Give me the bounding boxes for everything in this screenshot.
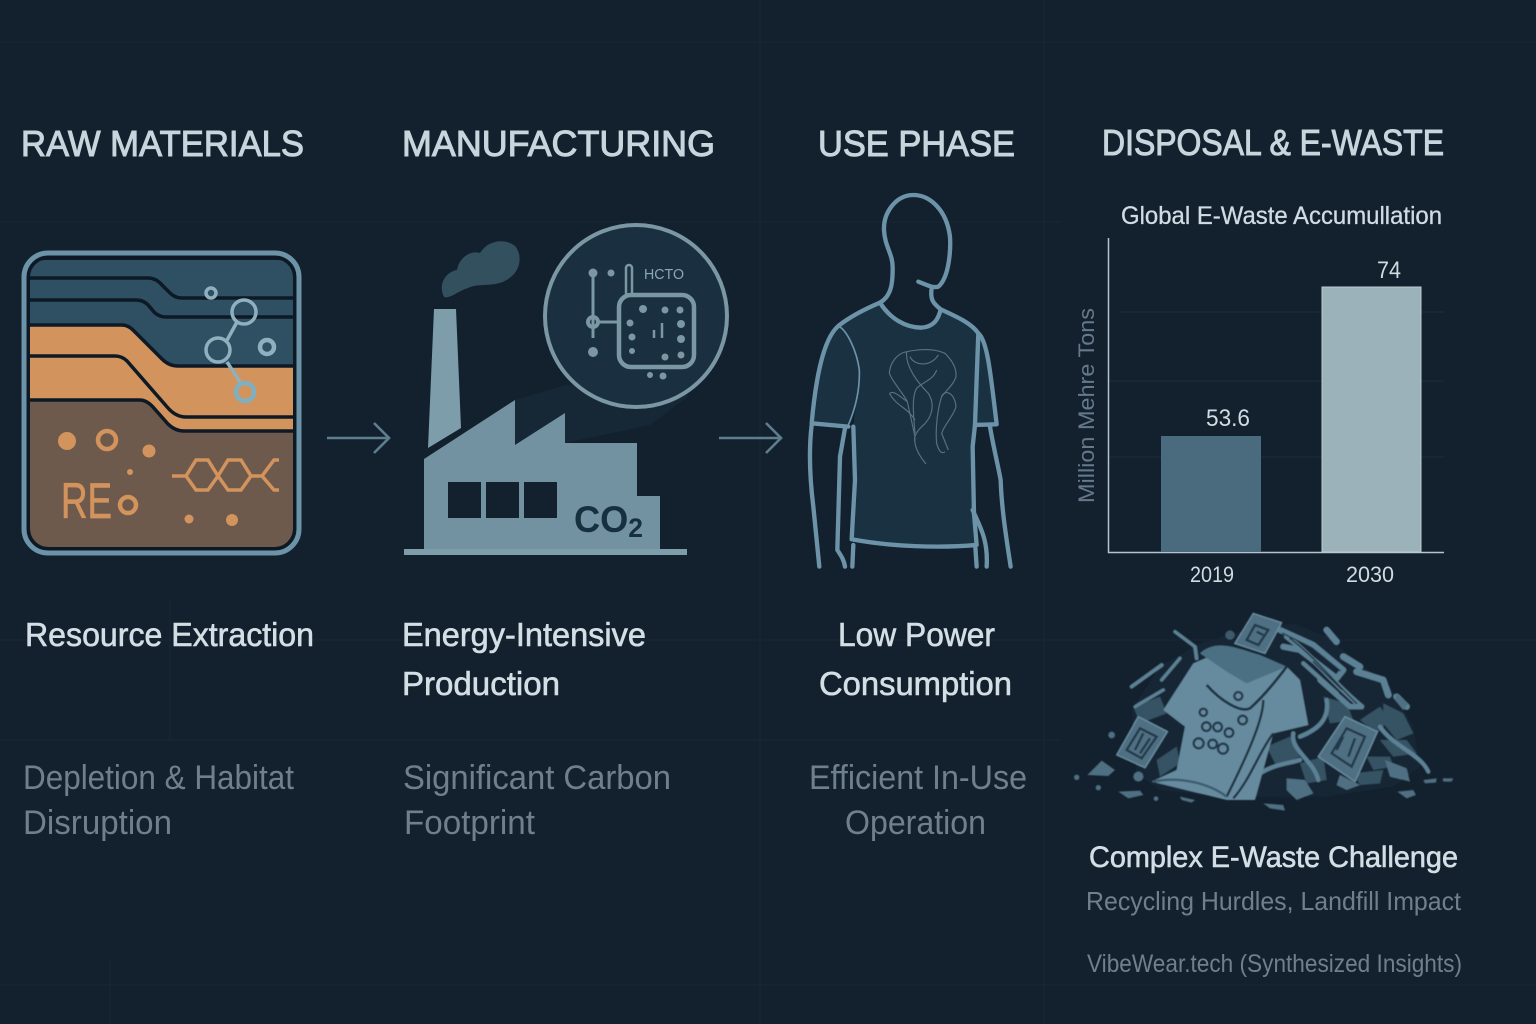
- heading: use phase: USE PHASE: [818, 123, 1015, 164]
- heading: disposal and e-waste: DISPOSAL & E-WASTE: [1102, 122, 1444, 163]
- text: efficient in-use operation: Efficient In-Use: [809, 759, 1027, 797]
- text: efficient in-use operation: [809, 759, 1027, 842]
- label: CO2: 2: [628, 513, 643, 543]
- subheading: energy-intensive production: [402, 616, 646, 702]
- icon: smoke: [442, 241, 520, 297]
- icon: mineral dots and rare earth mark: [58, 431, 279, 529]
- icon: mineral dots and rare earth mark: RE: [61, 473, 112, 529]
- subheading: energy-intensive production: Production: [402, 665, 560, 702]
- icon: microchip magnifier: [545, 225, 727, 407]
- illustration: e-waste pile: [1074, 613, 1453, 811]
- text: significant carbon footprint: Significant Carbon: [403, 759, 671, 797]
- label: 2019: 2019: [1190, 562, 1234, 587]
- icon: tangled cables: [1132, 630, 1428, 780]
- text: recycling hurdles: Recycling Hurdles, Landfill Impact: [1086, 886, 1462, 916]
- source credit: VibeWear.tech (Synthesized Insights): [1087, 950, 1462, 978]
- label: CO2: CO: [574, 499, 630, 540]
- icon: person wearing smart t-shirt: [810, 195, 1011, 567]
- subheading: low power consumption: [819, 616, 1012, 702]
- y-axis label: Million Mehre Tons: [1074, 308, 1099, 503]
- text: depletion and habitat disruption: Depletion & Habitat: [23, 759, 295, 797]
- icon: rubble: [1133, 697, 1417, 785]
- column: raw materials: [21, 123, 314, 842]
- text: depletion and habitat disruption: Disruption: [23, 804, 172, 842]
- column: disposal and e-waste: [1074, 122, 1462, 978]
- icon: microchip magnifier: HCTO: [644, 266, 684, 283]
- subheading: low power consumption: Low Power: [838, 616, 995, 653]
- label: 2030: 2030: [1346, 562, 1394, 587]
- icon: geological strata panel: [24, 253, 299, 553]
- icon: factory with microchip inset: [404, 225, 727, 555]
- column: use phase: [809, 123, 1027, 842]
- bar: 2019: [1161, 436, 1261, 552]
- subheading: low power consumption: Consumption: [819, 665, 1012, 702]
- text: significant carbon footprint: Footprint: [404, 804, 536, 842]
- column: manufacturing: [402, 123, 727, 842]
- value: 53.6: 53.6: [1206, 405, 1250, 432]
- arrow: raw materials to manufacturing: [327, 423, 389, 453]
- subheading: energy-intensive production: Energy-Intensive: [402, 616, 646, 653]
- icon: circuit boards: [1117, 613, 1377, 782]
- text: depletion and habitat disruption: [23, 759, 295, 842]
- bar chart: global e-waste accumulation: [1074, 202, 1444, 587]
- icon: factory building: [424, 400, 660, 549]
- value: 74: 74: [1377, 257, 1401, 284]
- chart title: Global E-Waste Accumullation: [1121, 202, 1442, 230]
- icon: discarded t-shirt: [1152, 646, 1308, 800]
- icon: shirt chest sketch: [889, 350, 956, 464]
- subheading: resource extraction: Resource Extraction: [25, 616, 314, 653]
- icon: molecule: [206, 288, 274, 401]
- icon: debris fragments: [1074, 630, 1453, 811]
- subheading: complex e-waste challenge: Complex E-Waste Challenge: [1089, 841, 1458, 874]
- text: significant carbon footprint: [403, 759, 671, 842]
- heading: raw materials: RAW MATERIALS: [21, 123, 304, 164]
- bar: 2030: [1322, 287, 1421, 552]
- heading: manufacturing: MANUFACTURING: [402, 123, 715, 164]
- arrow: manufacturing to use phase: [719, 423, 781, 453]
- icon: chimney: [428, 309, 461, 448]
- text: efficient in-use operation: Operation: [845, 804, 986, 842]
